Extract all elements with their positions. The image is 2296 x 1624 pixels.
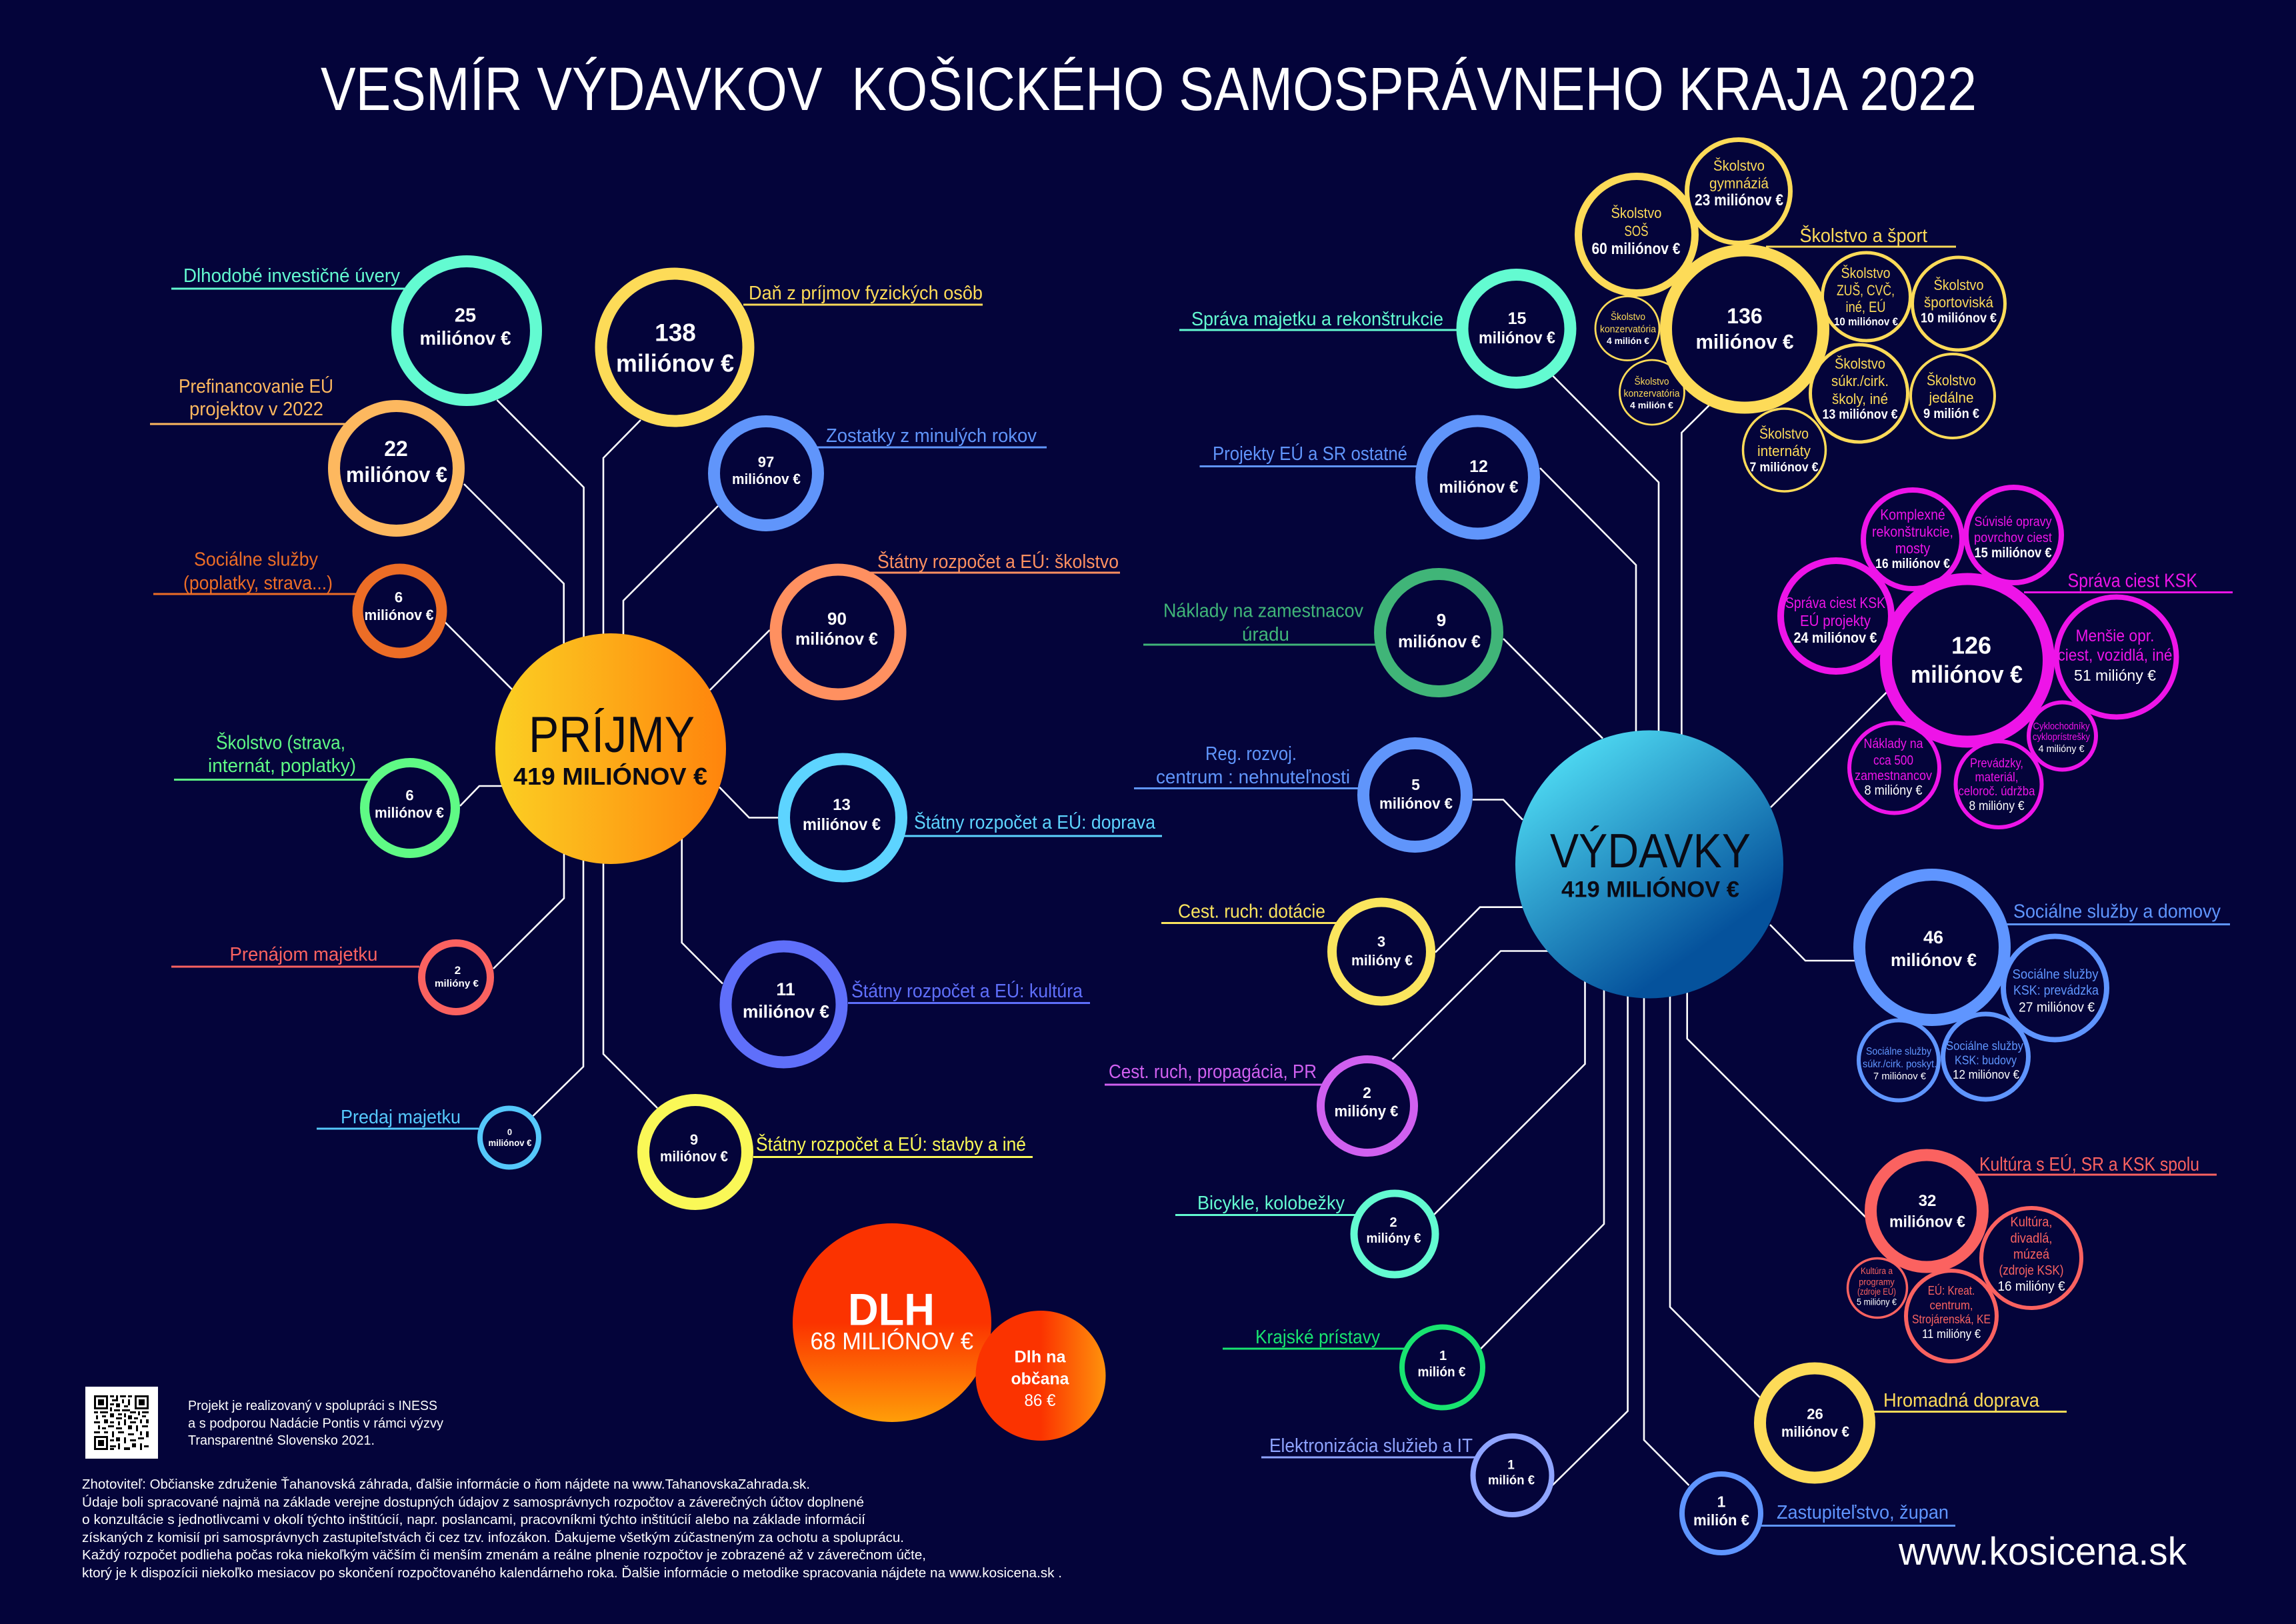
label: Sociálne služby (poplatky, strava...): Sociálne služby xyxy=(194,549,318,571)
label: Cest. ruch, propagácia, PR: Cest. ruch, propagácia, PR xyxy=(1109,1061,1317,1083)
sub-bubble: Náklady 8: cca 500 xyxy=(1873,753,1913,768)
bubble: 1 milión zastupiteľstvo: 1 xyxy=(1717,1493,1726,1511)
label: Štátny rozpočet a EÚ: doprava: Štátny rozpočet a EÚ: doprava xyxy=(914,811,1156,833)
sub-bubble: SOŠ 60: SOŠ xyxy=(1624,223,1648,239)
sub-bubble: Súvislé opravy 15 xyxy=(1966,487,2061,583)
sub-bubble: ZUŠ 10 xyxy=(1823,253,1911,341)
sub-bubble: súkromní poskytovatelia 7: Sociálne služby xyxy=(1866,1046,1931,1057)
debt bubble: Dlh na občana xyxy=(976,1311,1105,1441)
label: Školstvo (strava, internát, poplatky): internát, poplatky) xyxy=(208,755,356,777)
label: Zastupiteľstvo, župan: Zastupiteľstvo, župan xyxy=(1777,1502,1949,1523)
bubble: 138 miliónov: miliónov € xyxy=(616,349,734,377)
bubble: 1 milión zastupiteľstvo xyxy=(1682,1474,1761,1553)
label: Elektronizácia služieb a IT: Elektronizácia služieb a IT xyxy=(1269,1435,1473,1457)
bubble: 2 milióny bicykle: milióny € xyxy=(1367,1231,1421,1246)
label: Prenájom majetku: Prenájom majetku xyxy=(229,944,377,965)
bubble: 22 miliónov: miliónov € xyxy=(346,463,447,487)
sub-bubble: ZUŠ 10: 10 miliónov € xyxy=(1834,315,1898,328)
label: Štátny rozpočet a EÚ: školstvo: Štátny rozpočet a EÚ: školstvo xyxy=(877,550,1119,573)
sub-bubble: kultúra a programy 5: programy xyxy=(1859,1277,1895,1287)
sub-bubble: EÚ projekty 24: Správa ciest KSK xyxy=(1785,594,1886,611)
bubble: 2 milióny propagácia: milióny € xyxy=(1335,1103,1399,1120)
sub-bubble: EÚ projekty 24: 24 miliónov € xyxy=(1793,629,1877,646)
sub-bubble: SOŠ 60 xyxy=(1579,176,1695,293)
bubble: 32 miliónov xyxy=(1871,1155,1983,1267)
bubble: 138 miliónov xyxy=(601,273,748,421)
bubble: 1 milión IT: 1 xyxy=(1507,1459,1515,1472)
sub-bubble: súkromné školy 13: súkr./cirk. xyxy=(1831,373,1889,389)
bubble: 32 miliónov: 32 xyxy=(1919,1192,1936,1210)
sub-bubble: súkromní poskytovatelia 7 xyxy=(1859,1020,1939,1100)
bubble: 3 milióny xyxy=(1332,903,1431,1001)
bubble: 0 miliónov: miliónov € xyxy=(488,1138,532,1148)
bubble: 136 miliónov: miliónov € xyxy=(1696,330,1793,353)
label: Predaj majetku: Predaj majetku xyxy=(341,1107,461,1128)
sub-bubble: konzervatóriá 4 (a): konzervatória xyxy=(1600,324,1657,335)
sub-bubble: kultúra a programy 5: Kultúra a xyxy=(1861,1266,1893,1276)
hub: Výdavky xyxy=(1515,731,1783,999)
sub-bubble: prevádzka 27 xyxy=(2003,936,2107,1040)
sub-bubble: Menšie opravy 51 xyxy=(2056,597,2176,717)
sub-bubble: gymnáziá 23: 23 miliónov € xyxy=(1695,191,1783,209)
sub-bubble: internáty 7: internáty xyxy=(1757,443,1811,459)
bubble: 9 miliónov stavby: 9 xyxy=(690,1131,698,1148)
sub-bubble: športoviská 10: 10 miliónov € xyxy=(1921,311,1997,325)
label: Školstvo a šport xyxy=(1766,224,1956,248)
credits and methodology note: Zhotoviteľ: Občianske združenie Ťahanovská záhrada, ďalšie informácie o ňom nájdete na www.TahanovskaZahrada.sk. xyxy=(82,1477,810,1492)
bubble: 0 miliónov: 0 xyxy=(507,1127,512,1137)
bubble: 97 miliónov: 97 xyxy=(758,453,774,471)
bubble: 22 miliónov: 22 xyxy=(384,437,408,461)
connector lines: expenses xyxy=(1392,372,1887,1485)
sub-bubble: Prevádzky 8: materiál, xyxy=(1975,771,2019,785)
connector lines: income xyxy=(445,400,780,1116)
sub-bubble: Prevádzky 8: celoroč. údržba xyxy=(1959,785,2035,799)
sub-bubble: konzervatóriá 4 (b): Školstvo xyxy=(1635,376,1669,387)
sub-bubble: súkromné školy 13: 13 miliónov € xyxy=(1823,407,1897,422)
bubble: 1 milión prístavy: 1 xyxy=(1439,1349,1447,1363)
sub-bubble: kultúra a programy 5 xyxy=(1848,1259,1907,1317)
sub-bubble: jedálne 9 xyxy=(1911,354,1995,438)
sub-bubble: jedálne 9: jedálne xyxy=(1929,389,1973,406)
bubble: 136 miliónov xyxy=(1666,251,1823,408)
hub: Príjmy xyxy=(495,633,726,864)
label: Náklady na zamestnancov úradu xyxy=(1143,600,1375,645)
bubble: 12 miliónov: miliónov € xyxy=(1439,478,1519,497)
bubble: 25 miliónov: 25 xyxy=(455,305,476,327)
bubble: 97 miliónov: miliónov € xyxy=(732,471,801,487)
label: Prenájom majetku xyxy=(171,944,419,968)
sub-bubble: Komplexné rekonštrukcie 16: rekonštrukcie, xyxy=(1872,523,1953,540)
label: Kultúra s EÚ, SR a KSK spolu: Kultúra s EÚ, SR a KSK spolu xyxy=(1979,1153,2199,1175)
label: Prefinancovanie EÚ projektov v 2022: projektov v 2022 xyxy=(189,399,323,420)
label: Školstvo (strava, internát, poplatky): Školstvo (strava, xyxy=(216,731,345,753)
sub-bubble: divadlá, múzeá 16: múzeá xyxy=(2013,1247,2050,1262)
label: Reg. rozvoj. centrum xyxy=(1134,743,1359,789)
bubble: 126 miliónov: miliónov € xyxy=(1911,661,2023,688)
label: Hromadná doprava: Hromadná doprava xyxy=(1883,1390,2040,1411)
sub-bubble: Súvislé opravy 15: Súvislé opravy xyxy=(1975,515,2052,529)
bubble: 9 miliónov úrad: miliónov € xyxy=(1398,631,1481,651)
bubble: 6 miliónov školstvo xyxy=(365,763,455,853)
label: Projekty EÚ a SR ostatné: Projekty EÚ a SR ostatné xyxy=(1213,443,1407,465)
sub-bubble: prevádzka 27: 27 miliónov € xyxy=(2019,1000,2095,1015)
sub-bubble: Prevádzky 8: 8 milióny € xyxy=(1969,799,2025,813)
debt bubble: Dlh na občana: 86 € xyxy=(1024,1391,1056,1410)
credits and methodology note: o konzultácie s jednotlivcami v okolí týchto inštitúcií, napr. poslancami, pracovníkmi týchto inštitúcií alebo na základe informácií xyxy=(82,1513,865,1527)
sub-bubble: gymnáziá 23 xyxy=(1687,140,1791,243)
project note: a s podporou Nadácie Pontis v rámci výzvy xyxy=(188,1416,443,1431)
bubble: 25 miliónov: miliónov € xyxy=(420,328,511,349)
sub-bubble: konzervatóriá 4 (b): 4 milión € xyxy=(1630,400,1673,411)
bubble: 3 milióny: milióny € xyxy=(1351,952,1413,969)
sub-bubble: ZUŠ 10: iné, EÚ xyxy=(1845,299,1885,315)
label: Krajské prístavy: Krajské prístavy xyxy=(1255,1327,1380,1348)
sub-bubble: Prevádzky 8 xyxy=(1956,741,2041,827)
sub-bubble: kultúra a programy 5: 5 milióny € xyxy=(1857,1297,1897,1307)
bubble: 22 miliónov xyxy=(334,406,459,531)
bubble: 126 miliónov: 126 xyxy=(1951,632,1991,659)
label: Správa ciest KSK: Správa ciest KSK xyxy=(2068,571,2198,592)
sub-bubble: konzervatóriá 4 (a): Školstvo xyxy=(1611,311,1645,323)
sub-bubble: konzervatóriá 4 (b): konzervatória xyxy=(1624,388,1680,399)
credits and methodology note: ktorý je k dispozícii niekoľko mesiacov po skončení rozpočtovaného kalendárneho roka. Ďalšie informácie o metodike spracovania nájdete na www.kosicena.sk . xyxy=(82,1565,1062,1581)
bubble: 15 miliónov: 15 xyxy=(1508,309,1526,328)
label: Prefinancovanie EÚ projektov v 2022 xyxy=(150,375,347,425)
bubble: 9 miliónov stavby xyxy=(643,1100,747,1204)
sub-bubble: Menšie opravy 51: Menšie opr. xyxy=(2076,627,2155,645)
sub-bubble: Cyklochodníky 4: Cyklochodníky xyxy=(2033,721,2090,732)
sub-bubble: súkromné školy 13: Školstvo xyxy=(1835,355,1885,372)
bubble: 13 miliónov: miliónov € xyxy=(803,815,881,834)
bubble: 1 milión IT xyxy=(1473,1436,1552,1515)
bubble: 136 miliónov: 136 xyxy=(1727,304,1763,328)
label: Krajské prístavy xyxy=(1223,1327,1405,1349)
sub-bubble: prevádzka 27: KSK: prevádzka xyxy=(2013,983,2099,998)
cluster: Kultúra xyxy=(1848,1153,2217,1361)
sub-bubble: divadlá, múzeá 16: divadlá, xyxy=(2011,1231,2052,1246)
label: Dlhodobé investičné úvery: Dlhodobé investičné úvery xyxy=(183,265,400,287)
sub-bubble: kultúra a programy 5: (zdroje EÚ) xyxy=(1857,1287,1896,1297)
sub-bubble: ZUŠ 10: Školstvo xyxy=(1841,265,1891,281)
sub-bubble: Menšie opravy 51: 51 milióny € xyxy=(2074,667,2156,684)
sub-bubble: gymnáziá 23: gymnáziá xyxy=(1709,175,1769,192)
sub-bubble: športoviská 10: športoviská xyxy=(1924,294,1994,311)
sub-bubble: Komplexné rekonštrukcie 16: Komplexné xyxy=(1880,507,1945,523)
project note: Transparentné Slovensko 2021. xyxy=(188,1433,375,1448)
label: Daň z príjmov fyzických osôb: Daň z príjmov fyzických osôb xyxy=(749,283,983,304)
bubble: 138 miliónov: 138 xyxy=(655,319,696,347)
sub-bubble: budovy 12: KSK: budovy xyxy=(1955,1053,2017,1067)
sub-bubble: SOŠ 60: Školstvo xyxy=(1611,205,1661,221)
debt bubble: Dlh na občana: občana xyxy=(1011,1369,1070,1388)
hub: Výdavky: 419 MILIÓNOV € xyxy=(1561,877,1739,903)
sub-bubble: Cyklochodníky 4: cykloprístrešky xyxy=(2033,732,2091,743)
bubble: 1 milión IT: milión € xyxy=(1488,1473,1535,1488)
bubble: 2 milióny príjem xyxy=(421,943,491,1012)
bubble: 6 miliónov školstvo: miliónov € xyxy=(375,804,444,821)
bubble: 12 miliónov xyxy=(1421,421,1534,533)
sub-bubble: divadlá, múzeá 16: Kultúra, xyxy=(2011,1215,2052,1229)
sub-bubble: jedálne 9: Školstvo xyxy=(1927,372,1976,389)
bubble: 46 miliónov: 46 xyxy=(1923,927,1943,947)
credits and methodology note xyxy=(82,1477,1062,1581)
sub-bubble: divadlá, múzeá 16: 16 milióny € xyxy=(1997,1279,2065,1294)
bubble: 12 miliónov: 12 xyxy=(1469,457,1488,476)
bubble: 5 miliónov: 5 xyxy=(1411,776,1420,793)
label: Zostatky z minulých rokov: Zostatky z minulých rokov xyxy=(826,425,1037,447)
sub-bubble: Náklady 8: 8 milióny € xyxy=(1864,783,1923,798)
bubble: 1 milión prístavy xyxy=(1402,1327,1483,1408)
label: Sociálne služby (poplatky, strava...) xyxy=(153,549,357,595)
sub-bubble: internáty 7 xyxy=(1743,409,1825,491)
label: Školstvo (strava, internát, poplatky) xyxy=(174,731,371,781)
label: Náklady na zamestnancov úradu: úradu xyxy=(1242,624,1289,645)
bubble: 1 milión prístavy: milión € xyxy=(1417,1365,1465,1380)
debt bubble: Dlh xyxy=(793,1223,991,1422)
sub-bubble: SOŠ 60: 60 miliónov € xyxy=(1592,240,1680,258)
bubble: 32 miliónov: miliónov € xyxy=(1889,1213,1965,1231)
credits and methodology note: Údaje boli spracované najmä na základe verejne dostupných údajov z samosprávnych rozpočtov a záverečných účtov doplnené xyxy=(82,1495,864,1510)
bubble: 2 milióny propagácia: 2 xyxy=(1363,1084,1371,1101)
sub-bubble: jedálne 9: 9 milión € xyxy=(1923,407,1979,421)
bubble: 9 miliónov úrad: 9 xyxy=(1437,610,1446,630)
sub-bubble: Súvislé opravy 15: povrchov ciest xyxy=(1974,531,2052,545)
sub-bubble: Náklady 8: zamestnancov xyxy=(1855,769,1932,783)
sub-bubble: športoviská 10 xyxy=(1912,257,2005,350)
label: Cest. ruch: dotácie: Cest. ruch: dotácie xyxy=(1178,901,1325,923)
sub-bubble: súkromní poskytovatelia 7: 7 miliónov € xyxy=(1873,1071,1927,1082)
label: Štátny rozpočet a EÚ: stavby a iné: Štátny rozpočet a EÚ: stavby a iné xyxy=(756,1133,1026,1155)
bubble: 1 milión zastupiteľstvo: milión € xyxy=(1693,1511,1749,1529)
label: Reg. rozvoj. centrum: Reg. rozvoj. xyxy=(1205,743,1297,765)
sub-bubble: Komplexné rekonštrukcie 16 xyxy=(1863,490,1962,589)
bubble: 2 milióny príjem: 2 xyxy=(455,964,461,977)
label: Štátny rozpočet a EÚ: kultúra: Štátny rozpočet a EÚ: kultúra xyxy=(851,979,1083,1002)
project note xyxy=(188,1399,443,1448)
label: Školstvo a šport: Školstvo a šport xyxy=(1800,224,1927,247)
sub-bubble: kreatívne centrum 11: 11 milióny € xyxy=(1922,1327,1981,1341)
sub-bubble: športoviská 10: Školstvo xyxy=(1933,277,1984,293)
bubble: 2 milióny príjem: milióny € xyxy=(435,978,479,989)
bubble: 9 miliónov úrad xyxy=(1380,574,1497,691)
sub-bubble: Súvislé opravy 15: 15 miliónov € xyxy=(1975,545,2052,561)
sub-bubble: kreatívne centrum 11 xyxy=(1906,1271,1997,1361)
bubble: 11 miliónov: miliónov € xyxy=(743,1001,829,1021)
bubble: 97 miliónov xyxy=(714,421,818,525)
sub-bubble: budovy 12: Sociálne služby xyxy=(1946,1039,2023,1053)
label: Bicykle, kolobežky: Bicykle, kolobežky xyxy=(1197,1193,1345,1214)
bubble: 90 miliónov: 90 xyxy=(827,609,847,629)
sub-bubble: kreatívne centrum 11: centrum, xyxy=(1929,1298,1973,1312)
sub-bubble: kreatívne centrum 11: Strojárenská, KE xyxy=(1912,1312,1991,1326)
sub-bubble: internáty 7: Školstvo xyxy=(1759,425,1809,442)
sub-bubble: EÚ projekty 24 xyxy=(1781,561,1891,671)
sub-bubble: Náklady 8 xyxy=(1849,723,1939,813)
bubble: 6 miliónov školstvo: 6 xyxy=(405,787,414,804)
sub-bubble: súkromné školy 13: školy, iné xyxy=(1832,391,1888,407)
label: Sociálne služby a domovy: Sociálne služby a domovy xyxy=(2013,901,2221,923)
label: Reg. rozvoj. centrum: centrum : nehnuteľnosti xyxy=(1156,767,1350,788)
sub-bubble: EÚ projekty 24: EÚ projekty xyxy=(1800,612,1871,629)
sub-bubble: súkromní poskytovatelia 7: súkr./cirk. poskyt. xyxy=(1863,1059,1937,1070)
hub: Príjmy: PRÍJMY xyxy=(529,707,695,763)
hub: Príjmy: 419 MILIÓNOV € xyxy=(513,762,707,790)
cluster: Správa ciest KSK xyxy=(1781,487,2233,827)
bubble: 26 miliónov xyxy=(1760,1368,1869,1477)
bubble: 6 miliónov sociálne xyxy=(357,569,441,653)
bubble: 6 miliónov sociálne: miliónov € xyxy=(364,607,433,623)
sub-bubble: Prevádzky 8: Prevádzky, xyxy=(1970,757,2023,771)
bubble: 2 milióny propagácia xyxy=(1321,1059,1414,1153)
debt bubble: Dlh na občana: Dlh na xyxy=(1015,1348,1067,1367)
credits and methodology note: získaných z komisií pri samosprávnych zastupiteľstvách či cez tzv. infozákon. Ďakujeme všetkým zúčastneným za ochotu a spoluprácu. xyxy=(82,1530,904,1545)
sub-bubble: divadlá, múzeá 16: (zdroje KSK) xyxy=(1999,1263,2064,1278)
sub-bubble: budovy 12: 12 miliónov € xyxy=(1953,1068,2019,1081)
cluster: Školstvo a šport xyxy=(1579,140,2005,491)
sub-bubble: prevádzka 27: Sociálne služby xyxy=(2012,967,2099,982)
website URL: www.kosicena.sk xyxy=(1898,1530,2187,1573)
sub-bubble: súkromné školy 13 xyxy=(1811,345,1908,442)
cluster: Sociálne služby a domovy xyxy=(1859,875,2230,1100)
sub-bubble: Komplexné rekonštrukcie 16: mosty xyxy=(1895,540,1930,557)
sub-bubble: budovy 12 xyxy=(1943,1014,2028,1099)
bubble: 90 miliónov: miliónov € xyxy=(795,629,878,649)
bubble: 5 miliónov xyxy=(1363,743,1467,847)
sub-bubble: konzervatóriá 4 (a): 4 milión € xyxy=(1607,335,1649,346)
bubble: 0 miliónov xyxy=(480,1108,539,1167)
bubble: 126 miliónov xyxy=(1886,579,2049,741)
QR code xyxy=(85,1387,158,1459)
bubble: 3 milióny: 3 xyxy=(1377,933,1385,950)
sub-bubble: konzervatóriá 4 (b) xyxy=(1620,360,1684,425)
bubble: 9 miliónov stavby: miliónov € xyxy=(660,1148,728,1165)
sub-bubble: internáty 7: 7 miliónov € xyxy=(1749,461,1819,475)
bubble: 11 miliónov: 11 xyxy=(776,979,795,999)
credits and methodology note: Každý rozpočet podlieha počas roka niekoľkým väčším či menším zmenám a reálne plnenie rozpočtov je zobrazené až v záverečnom účte, xyxy=(82,1548,926,1563)
title: VESMÍR VÝDAVKOV KOŠICKÉHO SAMOSPRÁVNEHO KRAJA 2022 xyxy=(321,55,1977,123)
sub-bubble: divadlá, múzeá 16 xyxy=(1981,1208,2081,1308)
bubble: 13 miliónov: 13 xyxy=(833,796,851,814)
bubble: 90 miliónov xyxy=(776,569,900,695)
sub-bubble: Náklady 8: Náklady na xyxy=(1864,737,1923,751)
sub-bubble: Menšie opravy 51: ciest, vozidlá, iné xyxy=(2057,646,2172,665)
label: Sociálne služby (poplatky, strava...): (poplatky, strava...) xyxy=(183,573,333,594)
sub-bubble: Komplexné rekonštrukcie 16: 16 miliónov € xyxy=(1875,557,1950,571)
label: Prefinancovanie EÚ projektov v 2022: Prefinancovanie EÚ xyxy=(179,375,333,397)
bubble: 11 miliónov xyxy=(725,947,841,1063)
bubble: 5 miliónov: miliónov € xyxy=(1379,795,1453,812)
debt bubble: Dlh: 68 MILIÓNOV € xyxy=(811,1327,973,1355)
label: Náklady na zamestnancov úradu: Náklady na zamestnacov xyxy=(1163,600,1363,621)
bubble: 2 milióny bicykle xyxy=(1354,1193,1435,1275)
label: Správa majetku a rekonštrukcie: Správa majetku a rekonštrukcie xyxy=(1191,309,1443,330)
bubble: 15 miliónov xyxy=(1463,275,1571,383)
sub-bubble: konzervatóriá 4 (a) xyxy=(1595,296,1659,360)
debt bubble: Dlh: DLH xyxy=(848,1284,935,1335)
bubble: 13 miliónov xyxy=(784,759,901,876)
sub-bubble: kreatívne centrum 11: EÚ: Kreat. xyxy=(1928,1283,1975,1297)
bubble: 26 miliónov: miliónov € xyxy=(1781,1423,1849,1440)
hub: Výdavky: VÝDAVKY xyxy=(1550,825,1751,878)
bubble: 15 miliónov: miliónov € xyxy=(1479,329,1555,347)
bubble: 2 milióny bicykle: 2 xyxy=(1389,1215,1397,1230)
sub-bubble: Cyklochodníky 4: 4 milióny € xyxy=(2039,743,2085,755)
project note: Projekt je realizovaný v spolupráci s INESS xyxy=(188,1399,437,1413)
bubble: 26 miliónov: 26 xyxy=(1807,1405,1823,1423)
sub-bubble: gymnáziá 23: Školstvo xyxy=(1713,157,1765,174)
label: Správa ciest KSK xyxy=(2024,571,2233,593)
bubble: 25 miliónov xyxy=(397,261,536,400)
bubble: 46 miliónov: miliónov € xyxy=(1891,950,1977,970)
sub-bubble: Cyklochodníky 4 xyxy=(2029,703,2096,769)
bubble: 6 miliónov sociálne: 6 xyxy=(395,589,403,605)
sub-bubble: ZUŠ 10: ZUŠ, CVČ, xyxy=(1837,282,1895,299)
bubble: 46 miliónov xyxy=(1859,875,2005,1020)
